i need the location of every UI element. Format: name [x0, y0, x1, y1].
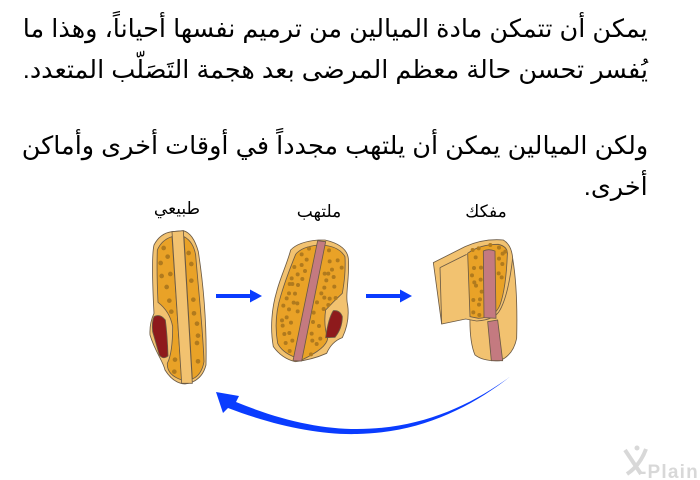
illustration: inflamed nerve [272, 240, 349, 362]
text block: second paragraph [22, 128, 648, 201]
text block: second paragraph: أخرى. [584, 173, 648, 201]
illustration: normal nerve [150, 231, 206, 384]
illustration: dismantled nerve [433, 240, 517, 361]
arrow: curved return [216, 376, 511, 434]
logo: X-Plain [625, 446, 699, 480]
text block: first paragraph [23, 10, 648, 84]
arrow: inflamed to dismantled [366, 290, 412, 302]
label: dismantled: مفكك [465, 202, 507, 221]
text block: first paragraph: يمكن أن تتمكن مادة الميالين من ترميم نفسها أحياناً، وهذا ما [23, 15, 648, 43]
arrow: normal to inflamed [216, 290, 262, 302]
text block: second paragraph: ولكن الميالين يمكن أن يلتهب مجدداً في أوقات أخرى وأماكن [22, 132, 648, 160]
label: inflamed: ملتهب [297, 202, 341, 221]
text block: first paragraph: يُفسر تحسن حالة معظم المرضى بعد هجمة التَصَلّب المتعدد. [23, 56, 648, 84]
label: normal: طبيعي [154, 199, 200, 218]
